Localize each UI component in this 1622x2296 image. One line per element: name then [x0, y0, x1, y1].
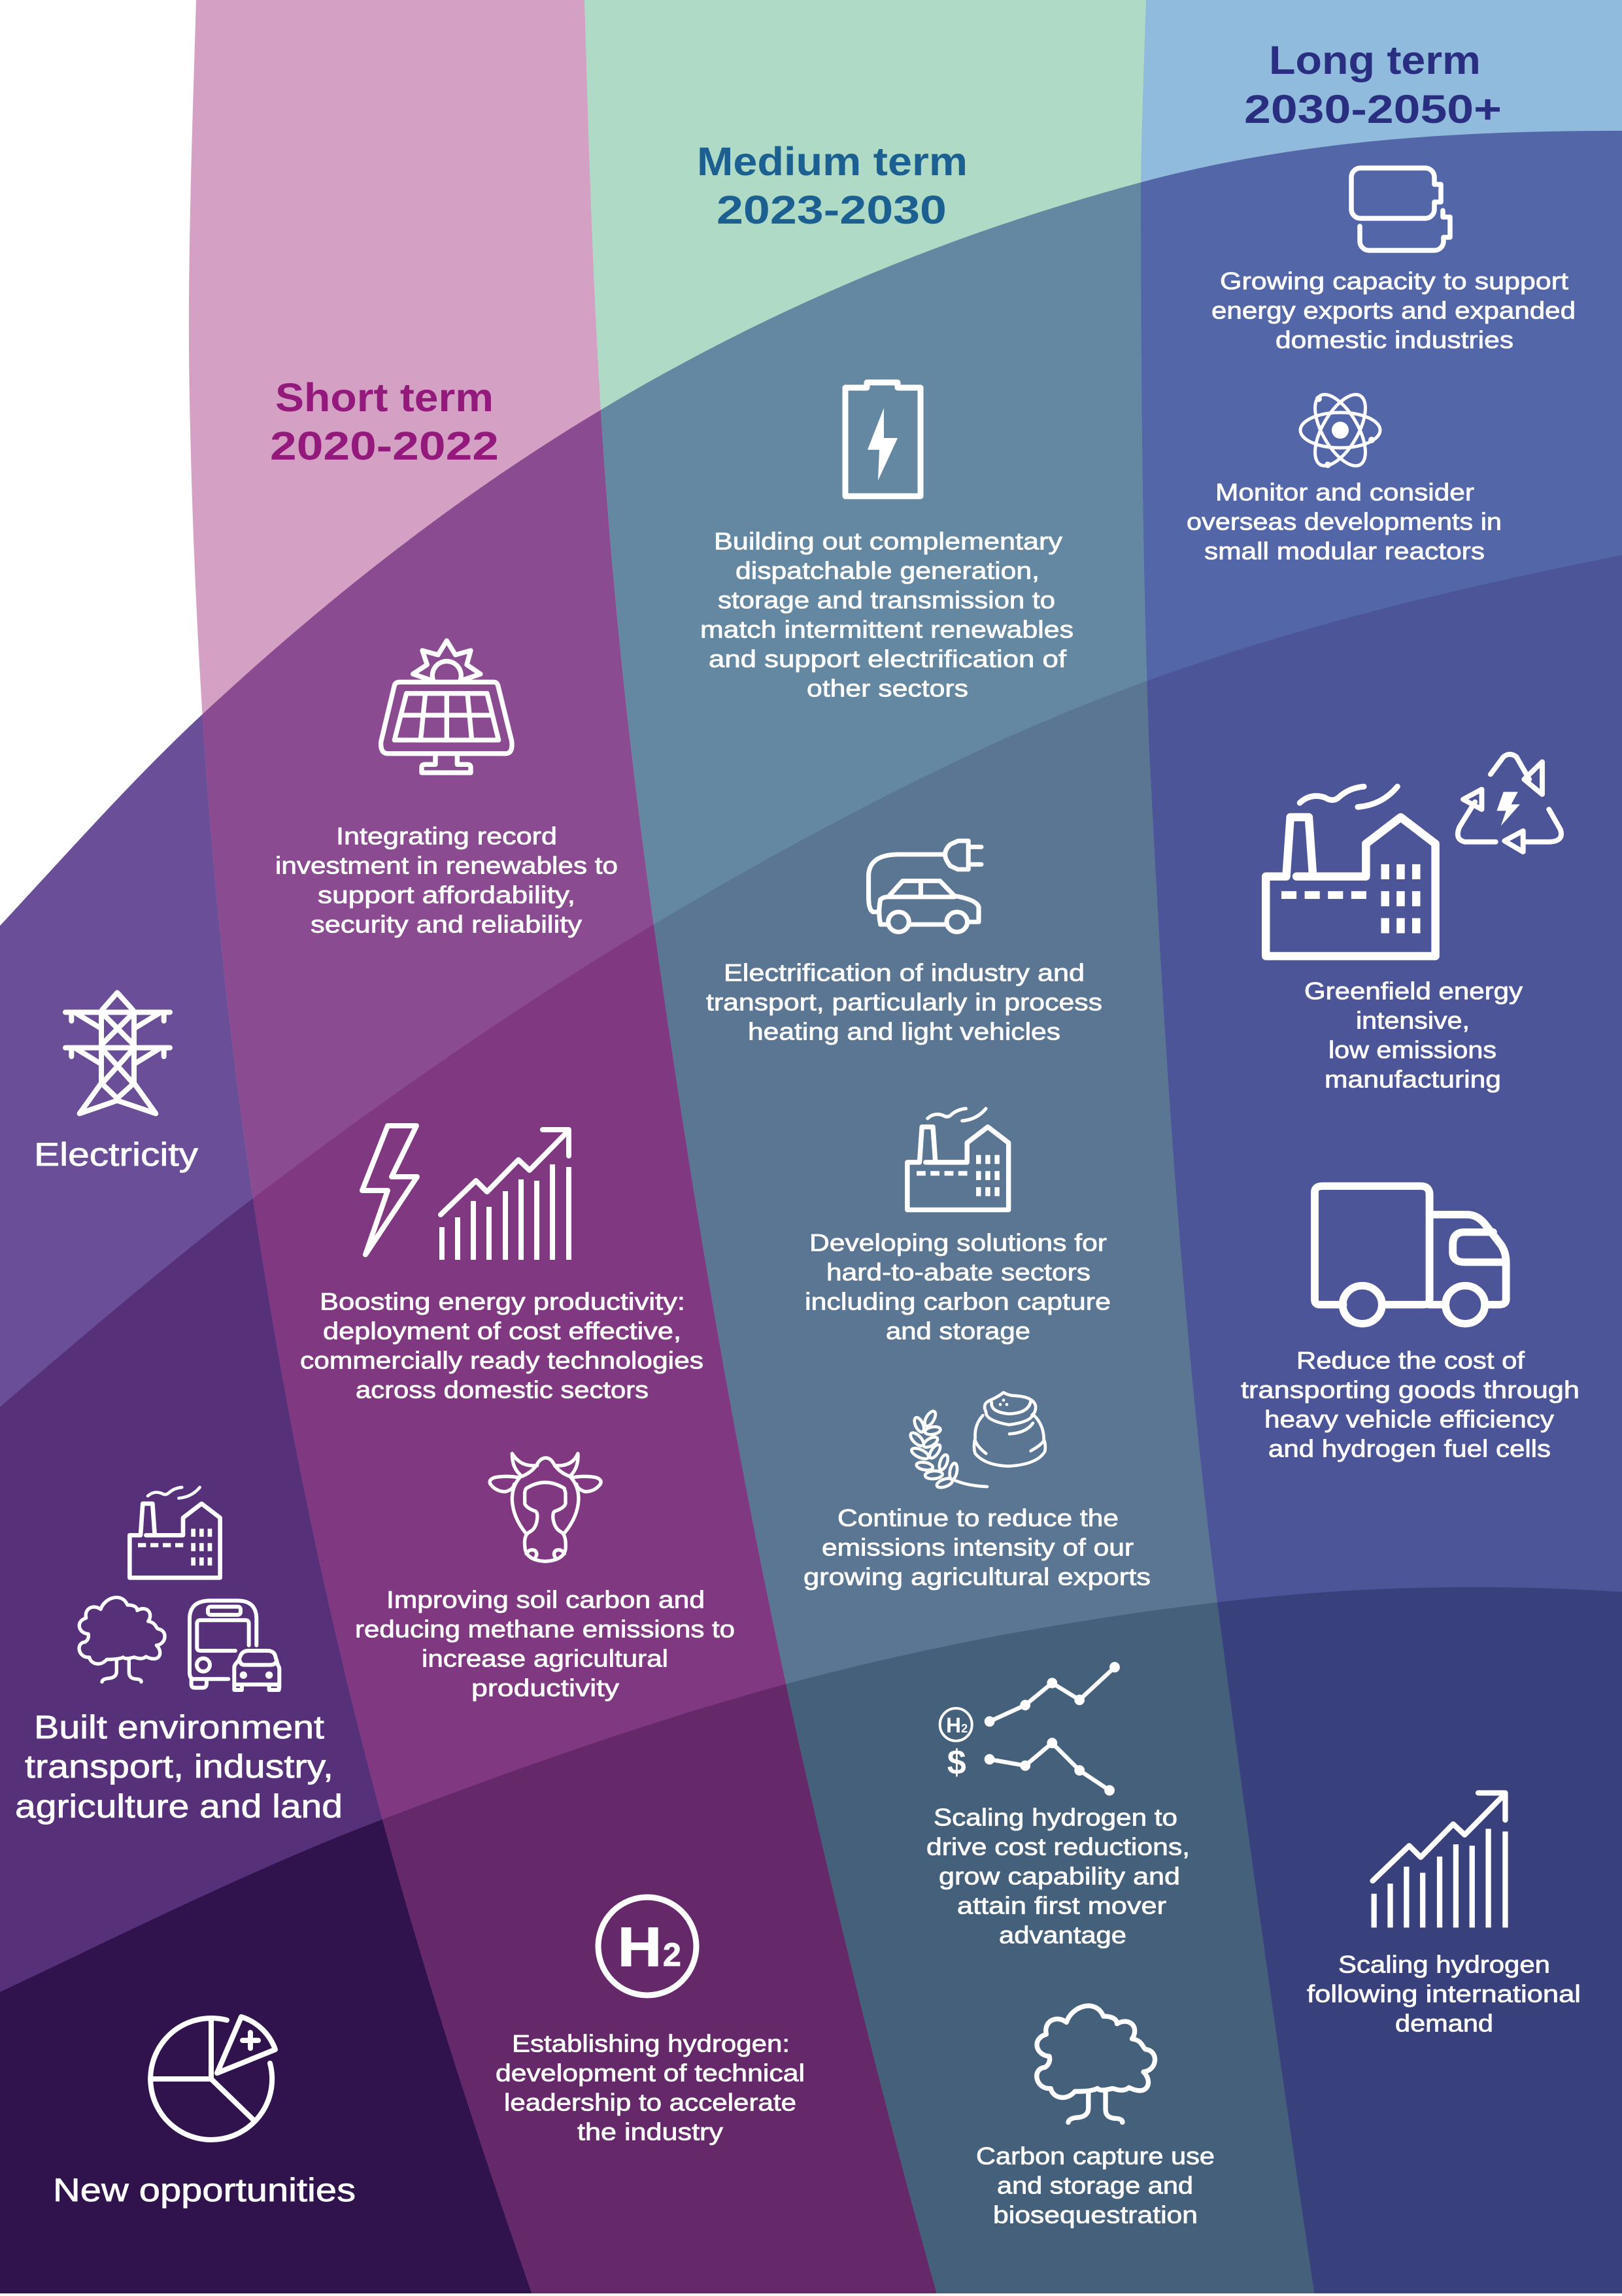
text: dispatchable generation: [700, 528, 1073, 702]
text: energy productivity: commercially ready technologies: [300, 1347, 703, 1374]
text: dispatchable generation: and support electrification of: [709, 646, 1067, 672]
panel: long term, heavy vehicles: [1241, 1186, 1580, 1462]
icon: cow: [490, 1453, 601, 1561]
label: built environment: Built environment: [34, 1709, 324, 1746]
text: heavy vehicles: [1241, 1347, 1580, 1462]
text: carbon capture: [976, 2143, 1215, 2228]
text: hydrogen demand: following international: [1307, 1981, 1581, 2007]
text: carbon capture: Carbon capture use: [976, 2143, 1215, 2169]
text: renewables: support affordability,: [318, 881, 575, 909]
text: renewables: Integrating record: [336, 822, 557, 850]
text: dispatchable generation: dispatchable generation,: [735, 557, 1039, 584]
heading: medium term: [697, 139, 968, 232]
text: scaling hydrogen to drive cost reductions: [926, 1804, 1190, 1948]
text: renewables: investment in renewables to: [275, 853, 618, 879]
icon: large tree: [1037, 2006, 1155, 2122]
text: establishing hydrogen: leadership to accelerate: [504, 2089, 796, 2116]
label: built environment: transport, industry,: [25, 1748, 333, 1785]
panel: long term, small modular reactors: [1187, 387, 1502, 565]
icon: truck: [1315, 1186, 1506, 1324]
panel: long term, hydrogen demand: [1307, 1793, 1581, 2037]
heading: short term: [270, 375, 499, 468]
text: agricultural exports: Continue to reduce the: [837, 1505, 1119, 1531]
text: energy exports: [1211, 268, 1576, 353]
text: greenfield manufacturing: Greenfield energy: [1304, 978, 1523, 1004]
panel: short term, energy productivity: [300, 1126, 703, 1403]
icon: H2 circle: H: [618, 1916, 662, 1978]
text: renewables: security and reliability: [311, 911, 583, 937]
text: carbon capture: and storage and: [997, 2172, 1193, 2199]
text: scaling hydrogen to drive cost reductions: advantage: [999, 1922, 1126, 1948]
text: scaling hydrogen to drive cost reductions: attain first mover: [957, 1892, 1166, 1919]
panel: medium term, scaling hydrogen: [926, 1662, 1190, 1948]
text: energy productivity: deployment of cost effective,: [323, 1318, 681, 1344]
icon: hydrogen and cost line charts: H: [946, 1714, 961, 1737]
icon: transmission pylon: [65, 992, 170, 1113]
text: agricultural exports: emissions intensity of our: [822, 1534, 1134, 1561]
text: agricultural exports: growing agricultural exports: [803, 1564, 1151, 1590]
icon: recycling arrows with bolt: [1458, 754, 1561, 852]
icon: factory: [129, 1487, 220, 1578]
text: agricultural exports: [803, 1505, 1151, 1590]
text: hydrogen demand: Scaling hydrogen: [1338, 1951, 1550, 1978]
heading: long term: [1244, 38, 1502, 131]
panel: medium term, carbon capture: [976, 2006, 1215, 2228]
icon: hydrogen and cost line charts: 2: [961, 1721, 968, 1735]
panel: medium term, electrification: [706, 841, 1102, 1045]
panel: new opportunities row label: [53, 2017, 356, 2208]
text: agriculture: increase agricultural: [422, 1645, 668, 1672]
heading: medium term: Medium term: [697, 139, 968, 184]
panel: built environment row label: [15, 1487, 343, 1825]
label: electricity: Electricity: [34, 1136, 198, 1173]
icon: hydrogen and cost line charts: $: [947, 1743, 966, 1782]
text: energy productivity: Boosting energy productivity:: [320, 1288, 685, 1315]
icon: tree: [79, 1597, 165, 1682]
panel: short term, agriculture: [355, 1453, 735, 1701]
text: energy exports: Growing capacity to support: [1220, 268, 1569, 294]
text: energy exports: domestic industries: [1276, 327, 1513, 353]
text: energy productivity: [300, 1288, 703, 1403]
text: small modular reactors: [1187, 479, 1502, 565]
icon: large factory: [1266, 786, 1436, 956]
heading: long term: 2030-2050+: [1244, 87, 1502, 131]
text: greenfield manufacturing: [1304, 978, 1523, 1093]
text: dispatchable generation: match intermittent renewables: [700, 616, 1073, 643]
heading: short term: Short term: [275, 375, 494, 420]
text: agriculture: Improving soil carbon and: [386, 1586, 705, 1613]
text: hydrogen demand: demand: [1395, 2010, 1493, 2037]
text: agriculture: productivity: [471, 1675, 620, 1701]
icon: atom: [1300, 387, 1380, 473]
icon: growth chart: [1372, 1793, 1508, 1927]
icon: solar panel: [381, 641, 512, 773]
text: hard-to-abate: including carbon capture: [805, 1288, 1111, 1315]
text: carbon capture: biosequestration: [993, 2202, 1198, 2228]
icon: stacked batteries: [1351, 168, 1450, 250]
text: establishing hydrogen: Establishing hydrogen:: [512, 2031, 790, 2057]
icon: pie chart with plus slice: [150, 2017, 275, 2140]
panel: medium term, hard-to-abate sectors: [805, 1109, 1111, 1344]
text: dispatchable generation: other sectors: [807, 675, 968, 702]
text: heavy vehicles: Reduce the cost of: [1296, 1347, 1525, 1374]
icon: bus and car: [190, 1600, 279, 1690]
icon: wheat: [908, 1410, 987, 1489]
heading: short term: 2020-2022: [270, 424, 499, 468]
text: renewables: [275, 822, 618, 937]
text: scaling hydrogen to drive cost reductions: Scaling hydrogen to: [934, 1804, 1177, 1831]
text: establishing hydrogen: [496, 2031, 805, 2146]
icon: H2 circle: 2: [663, 1936, 681, 1973]
text: heavy vehicles: heavy vehicle efficiency: [1264, 1406, 1555, 1433]
heading: medium term: 2023-2030: [717, 188, 947, 232]
text: small modular reactors: Monitor and consider: [1215, 479, 1474, 506]
panel: short term, renewables: [275, 641, 618, 937]
text: hydrogen demand: [1307, 1951, 1581, 2037]
text: scaling hydrogen to drive cost reductions: grow capability and: [939, 1863, 1180, 1889]
icon: growth chart: [439, 1130, 571, 1260]
text: small modular reactors: overseas developments in: [1187, 509, 1502, 535]
text: greenfield manufacturing: manufacturing: [1325, 1066, 1501, 1093]
text: greenfield manufacturing: low emissions: [1328, 1037, 1496, 1063]
text: establishing hydrogen: the industry: [577, 2118, 724, 2146]
text: hard-to-abate: and storage: [886, 1318, 1030, 1344]
text: hard-to-abate: hard-to-abate sectors: [826, 1259, 1090, 1285]
text: establishing hydrogen: development of technical: [496, 2059, 805, 2087]
icon: electric car with plug: [869, 841, 981, 932]
label: built environment: agriculture and land: [15, 1788, 343, 1825]
icon: lightning bolt: [362, 1126, 417, 1255]
text: electrification: transport, particularly in process: [706, 988, 1102, 1016]
text: electrification: Electrification of industry and: [724, 960, 1085, 986]
text: scaling hydrogen to drive cost reductions: drive cost reductions,: [926, 1833, 1190, 1861]
icon: small factory: [907, 1109, 1009, 1210]
text: greenfield manufacturing: intensive,: [1356, 1007, 1470, 1034]
text: energy exports: energy exports and expanded: [1211, 297, 1576, 324]
panel: electricity row label: [34, 992, 198, 1173]
text: small modular reactors: small modular reactors: [1204, 537, 1485, 565]
text: agriculture: [355, 1586, 735, 1701]
panel: long term, greenfield manufacturing: [1266, 754, 1561, 1093]
text: electrification: [706, 960, 1102, 1045]
text: electrification: heating and light vehicles: [748, 1019, 1060, 1045]
text: dispatchable generation: Building out complementary: [714, 528, 1063, 554]
icon: sack of grain: [974, 1393, 1045, 1466]
text: agriculture: reducing methane emissions to: [355, 1616, 735, 1642]
text: hard-to-abate: Developing solutions for: [809, 1229, 1107, 1257]
text: hard-to-abate: [805, 1229, 1111, 1344]
text: dispatchable generation: storage and transmission to: [718, 587, 1055, 613]
icon: H2 circle: [598, 1897, 696, 1995]
text: heavy vehicles: transporting goods through: [1241, 1377, 1580, 1403]
icon: battery: [845, 382, 921, 496]
label: new opportunities: New opportunities: [53, 2172, 356, 2208]
panel: medium term, dispatchable generation: [700, 382, 1073, 702]
panel: short term, hydrogen: [496, 1897, 805, 2146]
panel: long term, energy exports: [1211, 168, 1576, 353]
panel: medium term, agricultural exports: [803, 1393, 1151, 1590]
label: built environment: [15, 1709, 343, 1825]
heading: long term: Long term: [1269, 38, 1481, 82]
text: energy productivity: across domestic sectors: [356, 1377, 649, 1403]
icon: hydrogen and cost line charts: [940, 1662, 1120, 1796]
text: heavy vehicles: and hydrogen fuel cells: [1268, 1436, 1551, 1462]
